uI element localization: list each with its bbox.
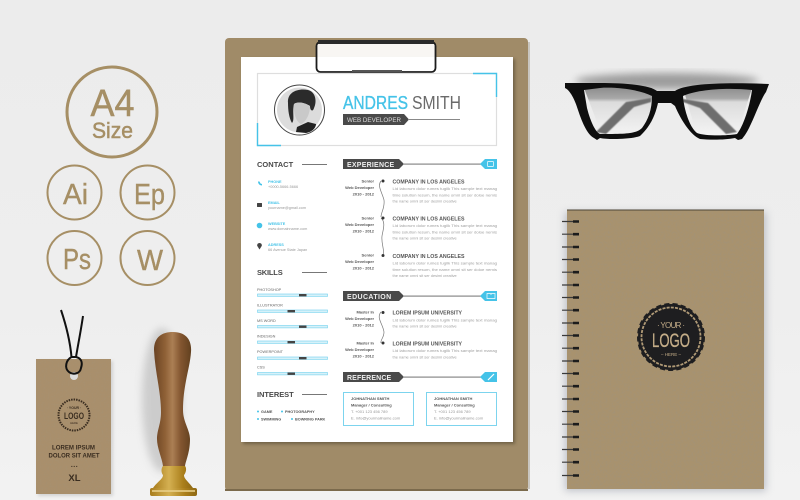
experience item 2: the name omni sit ser desimi creative [392,236,457,240]
tag text [48,444,100,484]
contact: address [257,243,307,252]
wax stamp [142,328,197,496]
skill: indesign: INDESIGN [257,334,276,338]
interest list: SWIMMING [261,418,281,422]
temple arms [596,98,737,134]
education item 1: 2010 - 2012 [353,322,375,328]
contact: phone [258,180,298,189]
education item 2: Lid laborum dolor rumes tugilk This sample text manag [392,348,497,353]
contact: address: 66 Avenue State Japan [268,248,307,252]
contact heading: CONTACT [257,160,294,169]
badge: Ps: Ps [63,244,91,276]
experience item 2: Senior [362,216,374,220]
tag string [61,310,83,374]
interest list [257,410,326,422]
experience item 1: Web Developer [345,185,374,190]
badge: A4 size [67,67,157,157]
experience item 3: Senior [362,252,374,258]
contact section [257,160,327,252]
education item 1: LOREM IPSUM UNIVERSITY [392,310,462,316]
experience item 2: time solution resum, the name omni sit ser doloe nemis [392,230,497,234]
experience item 3: 2010 - 2012 [353,266,375,270]
reference card 1: Manager / Consulting [351,402,392,408]
contact: email: yourname@gmail.com [268,206,306,210]
education item 1: the name omni sit ser desimi creative [392,324,457,328]
clipboard clip [316,40,436,72]
experience item 2: Lid laborum dolor rumes tugilk This sample text manag [392,223,497,228]
experience ribbon [343,159,497,169]
reference card 1 [344,392,414,426]
badge: A4 size: A4 [90,83,134,125]
education ribbon: EDUCATION [347,294,392,301]
job title ribbon: WEB DEVELOPER [347,117,401,124]
interest list: BOWRING PARK [295,418,326,422]
badge: Ai [48,166,102,220]
resume header box [258,74,496,146]
icon: link tag [480,372,497,382]
badge: Ai: Ai [63,179,88,211]
notebook logo [638,304,704,370]
education item 1: Web Developer [345,316,374,321]
tag text: LOREM IPSUM [52,444,95,452]
clipboard [225,38,530,491]
skill: powerpoint: POWERPOINT [257,350,284,354]
skill: photoshop: PHOTOSHOP [257,288,282,292]
education item 1: Master In [356,310,375,314]
experience item 1: COMPANY IN LOS ANGELES [392,180,465,186]
notebook logo: – HERE – [661,352,681,357]
skills section [257,268,328,375]
contact: email: EMAIL [268,201,280,205]
education item 2: LOREM IPSUM UNIVERSITY [392,342,462,348]
reference card 2: E. info@yourmailname.com [434,416,484,420]
tag text: ... [71,462,78,469]
name: ANDRES [343,92,408,113]
experience item 1: Senior [362,178,374,184]
icon: briefcase tag [480,159,497,169]
contact: phone: +0000-5666-5666 [268,185,298,189]
experience item 1: the name omni sit ser desimi creative [392,198,457,204]
cyan corner accents [258,74,496,146]
education ribbon [343,291,497,301]
education connector [379,312,384,343]
experience item 3 [345,252,497,278]
frame [565,83,769,140]
badge: W: W [137,245,164,277]
experience item 1: 2010 - 2012 [353,192,375,196]
badge: Ep [120,166,174,220]
spiral notebook [562,210,766,491]
experience item 3: Web Developer [345,259,374,264]
interest heading: INTEREST [257,390,294,399]
contact: website [257,222,307,231]
contact: website: www.domainname.com [268,227,307,231]
notebook logo: · YOUR · [657,321,685,330]
experience item 2: COMPANY IN LOS ANGELES [392,216,465,222]
portrait photo [274,85,324,135]
experience item 1: time solution resum, the name omni sit ser doloe nemis [392,192,497,198]
job title ribbon [343,114,460,125]
tag logo: LOGO [64,411,84,421]
education timeline [345,310,497,360]
contact: phone: PHONE [268,180,282,184]
contact: address: ADRESS [268,243,284,247]
tag logo: · YOUR · [67,406,81,410]
reference card 2: JOHNATHAN SMITH [434,396,472,401]
lenses [584,88,752,135]
contact: email [257,201,306,210]
reference card 2: T. +001 123 456 789 [434,409,471,414]
experience item 3: COMPANY IN LOS ANGELES [392,254,465,260]
timeline connector [379,181,384,255]
reference card 1: T. +001 123 456 789 [351,409,388,414]
education item 1: Lid laborum dolor rumes tugilk This sample text manag [392,318,497,322]
hang tag [36,310,113,496]
tag logo [58,400,90,430]
education item 2 [345,340,497,360]
reference card 1: E. info@yourmailname.com [351,416,401,420]
education item 1 [345,310,497,328]
resume paper [241,57,515,444]
experience item 2: Web Developer [345,222,374,227]
skill: css: CSS [257,366,265,370]
education item 2: Web Developer [345,347,374,352]
tag text: XL [68,473,81,484]
spiral binding [562,222,579,476]
experience item 1 [345,178,497,204]
experience item 1: Lid laborum dolor rumes tugilk This sample text manag [392,186,497,191]
reference card 2 [426,392,496,426]
experience item 2: 2010 - 2012 [353,228,375,234]
skills heading: SKILLS [257,268,284,277]
interest section [257,390,327,422]
contact: website: WEBSITE [268,222,286,226]
experience item 3: Lid laborum dolor rumes tugilk This sample text manag [392,260,497,266]
reference card 1: JOHNATHAN SMITH [351,396,389,401]
education item 2: Master In [356,340,375,346]
tag text: DOLOR SIT AMET [48,452,100,460]
badge: W [120,231,174,285]
glasses [565,73,769,140]
reference ribbon: REFERENCE [347,375,392,382]
experience item 3: the name omni sit ser desimi creative [392,273,457,278]
notebook logo: LOGO [652,331,690,352]
badge: Ep: Ep [134,179,165,211]
badge: A4 size: Size [92,118,133,143]
interest list: PHOTOGRAPHY [285,410,315,414]
tag logo: HERE [70,421,78,425]
experience item 3: time solution resum, the name omni sit ser doloe nemis [392,267,497,272]
reference card 2: Manager / Consulting [434,402,475,408]
skill: illustrator: ILLUSTRATOR [257,304,283,308]
reference ribbon [343,372,497,382]
icon: book tag [480,291,497,301]
experience timeline [345,178,497,278]
education item 2: the name omni sit ser desimi creative [392,354,457,360]
resume header box: SMITH [412,92,461,113]
experience item 2 [345,216,497,240]
badge: Ps [48,231,102,285]
interest list: GAME [261,410,273,414]
education item 2: 2010 - 2012 [353,354,375,358]
experience ribbon: EXPERIENCE [347,162,395,169]
skill: ms word: MS WORD [257,319,276,323]
